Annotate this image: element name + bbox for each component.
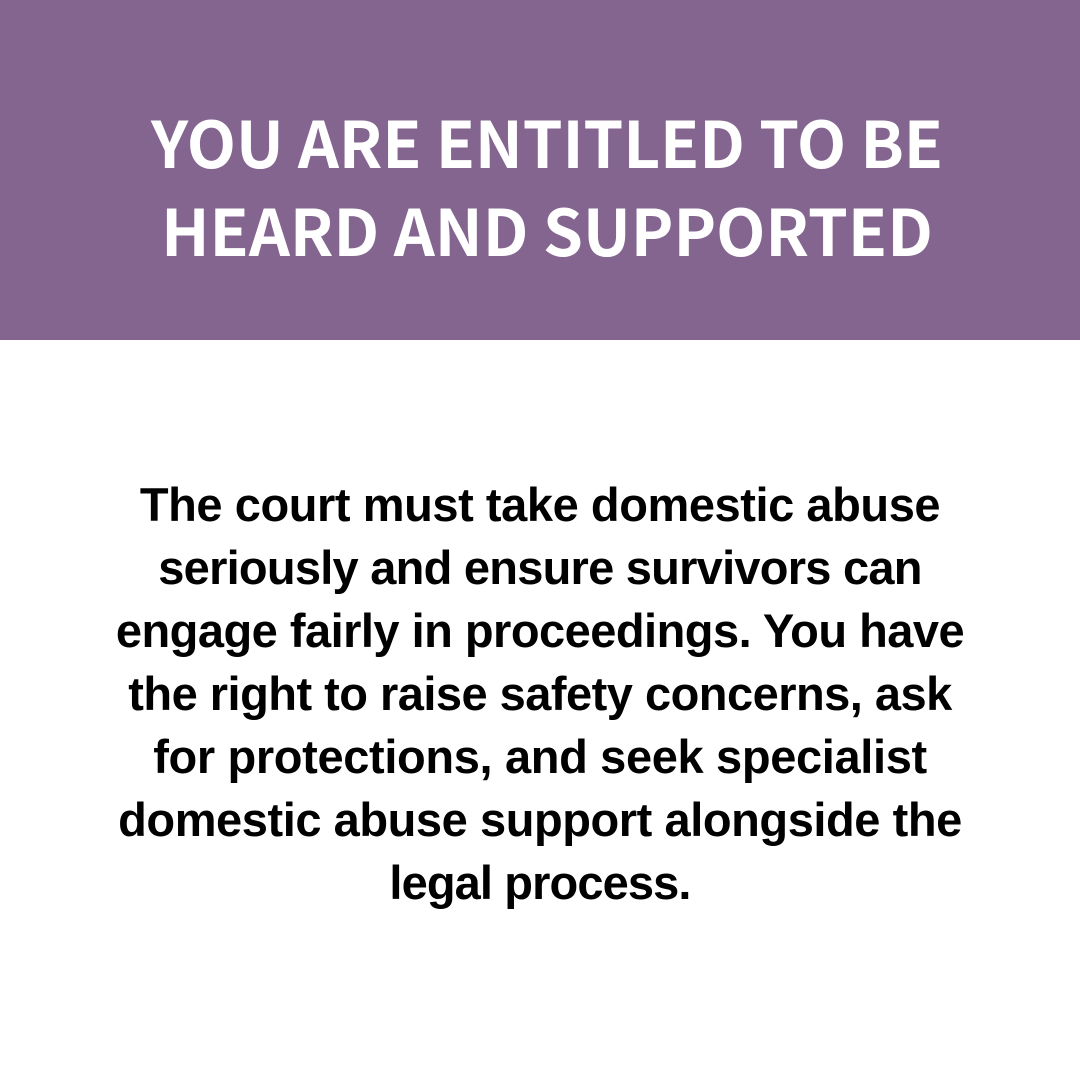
body text block: domestic abuse support alongside the — [118, 793, 962, 846]
header banner — [0, 0, 1080, 340]
title: HEARD AND SUPPORTED — [161, 183, 933, 275]
body text block: engage fairly in proceedings. You have — [116, 604, 964, 657]
title: YOU ARE ENTITLED TO BE — [151, 95, 943, 187]
body text block: seriously and ensure survivors can — [158, 541, 922, 594]
title — [150, 95, 943, 275]
body text block: for protections, and seek specialist — [153, 730, 927, 783]
body text block: the right to raise safety concerns, ask — [128, 667, 952, 720]
body text block: The court must take domestic abuse — [140, 478, 940, 531]
body text block — [116, 478, 964, 909]
body text block: legal process. — [389, 856, 691, 909]
